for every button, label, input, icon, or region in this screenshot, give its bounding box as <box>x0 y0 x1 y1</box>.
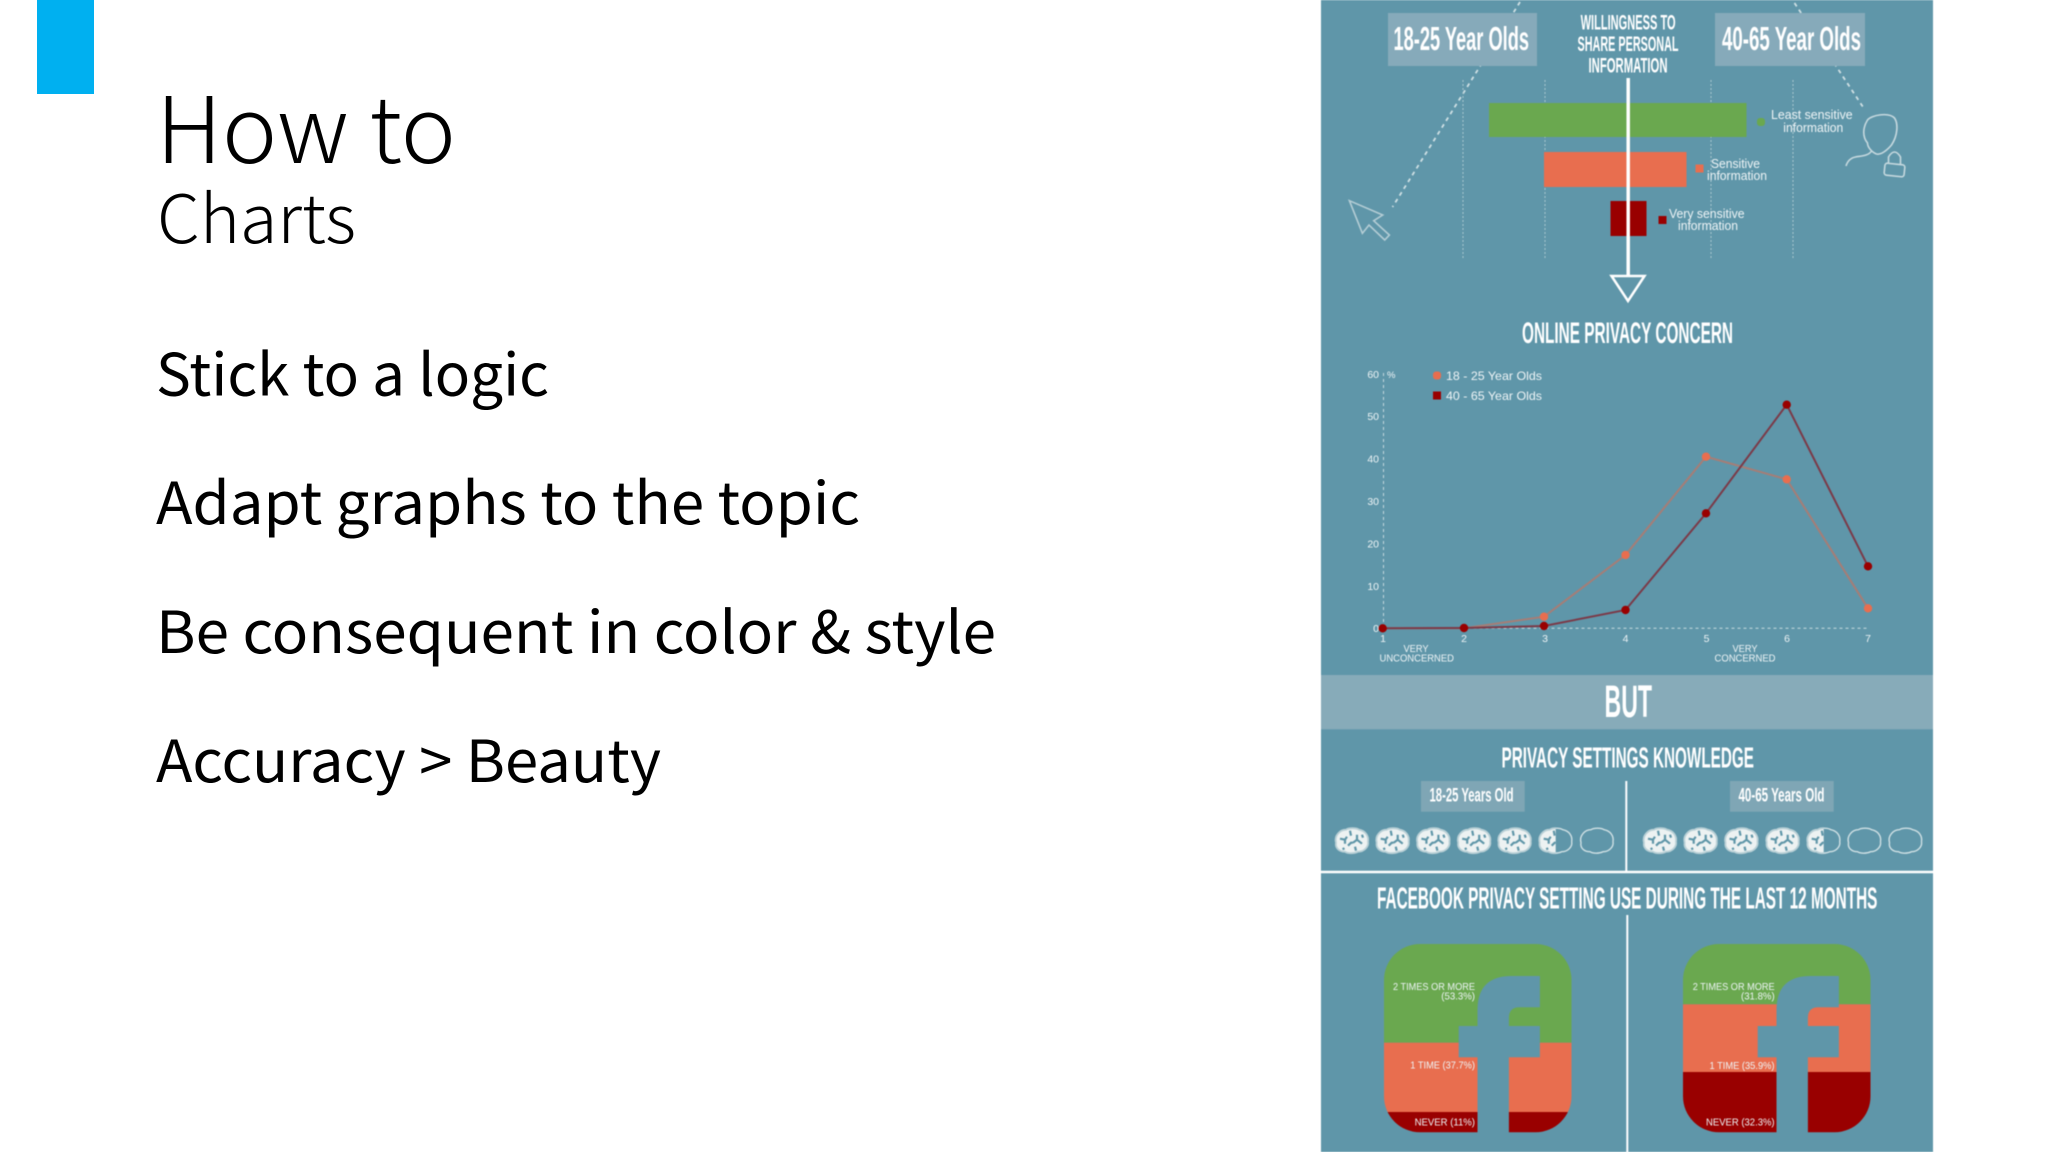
x axis labels: 2 <box>1461 633 1467 645</box>
label box: 40-65: 40-65 Year Olds <box>1722 20 1861 57</box>
chart: facebook logo 18-25: NEVER (11%) <box>1415 1117 1475 1129</box>
axis note: very unconcerned <box>1380 643 1454 665</box>
guideline 4: Accuracy > Beauty <box>156 715 661 799</box>
profile dashed line <box>1794 3 1863 107</box>
arrow <box>1612 78 1644 301</box>
chart legend: 18 - 25 Year Olds <box>1446 369 1542 383</box>
heading: privacy settings knowledge: PRIVACY SETTINGS KNOWLEDGE <box>1502 742 1754 774</box>
chart legend: 40 - 65 Year Olds <box>1446 389 1542 403</box>
panel: infographic <box>1321 0 1933 1152</box>
accent block <box>37 0 94 94</box>
guideline 1: Stick to a logic <box>156 328 549 412</box>
label box: 40-65 years old <box>1730 781 1834 812</box>
icon row: brains 18-25 <box>1336 828 1613 853</box>
legend: sensitive <box>1696 157 1767 183</box>
legend: sensitive: Sensitive <box>1711 157 1760 171</box>
y axis labels: 60 <box>1367 369 1379 381</box>
label box: 40-65 <box>1715 13 1865 66</box>
axis note: very concerned: VERY <box>1732 643 1758 655</box>
subtitle: Charts: Charts <box>157 166 356 263</box>
text block: guidelines <box>156 328 996 799</box>
section: willingness to share <box>1349 2 1905 301</box>
label box: 40-65 years old: 40-65 Years Old <box>1738 784 1824 806</box>
chart axes <box>1384 373 1868 628</box>
x axis labels: 6 <box>1784 633 1790 645</box>
legend: very sensitive: Very sensitive <box>1669 207 1745 221</box>
heading: willingness: SHARE PERSONAL <box>1578 33 1679 56</box>
legend: least sensitive: information <box>1783 121 1843 135</box>
chart: facebook logo 18-25: 1 TIME (37.7%) <box>1410 1059 1475 1071</box>
chart: facebook logo 18-25: (53.3%) <box>1441 990 1475 1002</box>
center divider <box>1625 781 1627 872</box>
axis note: very concerned <box>1714 643 1776 665</box>
axis note: very unconcerned: VERY <box>1404 643 1428 655</box>
y axis labels: 40 <box>1367 454 1379 466</box>
series: 40-65 <box>1378 400 1872 632</box>
heading: willingness: WILLINGNESS TO <box>1581 12 1676 34</box>
x axis labels: 4 <box>1623 633 1629 645</box>
bar: very sensitive <box>1610 201 1646 236</box>
y axis labels: 20 <box>1367 538 1379 550</box>
x axis labels: 3 <box>1542 633 1548 645</box>
y axis labels: 50 <box>1367 411 1379 423</box>
center divider <box>1626 915 1628 1152</box>
heading: willingness: INFORMATION <box>1588 55 1668 78</box>
chart: facebook logo 40-65: 1 TIME (35.9%) <box>1710 1060 1774 1072</box>
bar: sensitive <box>1544 152 1686 187</box>
legend: sensitive: information <box>1707 169 1767 183</box>
chart: facebook logo 18-25: 2 TIMES OR MORE <box>1393 981 1475 993</box>
axis note: very concerned: CONCERNED <box>1714 653 1776 665</box>
y axis labels <box>1367 369 1379 635</box>
chart: facebook logo 18-25 <box>1384 944 1572 1133</box>
label box: 18-25: 18-25 Year Olds <box>1394 20 1529 57</box>
y axis labels: 0 <box>1373 623 1379 635</box>
chart: facebook logo 40-65: NEVER (32.3%) <box>1706 1117 1775 1129</box>
guideline 2: Adapt graphs to the topic <box>156 457 860 541</box>
y axis labels: 10 <box>1367 581 1379 593</box>
chart: facebook logo 40-65 <box>1683 944 1871 1133</box>
section: facebook privacy setting use <box>1377 880 1877 1152</box>
chart: facebook logo 40-65: (31.8%) <box>1741 990 1775 1002</box>
section divider <box>1321 871 1933 873</box>
axis note: very unconcerned: UNCONCERNED <box>1380 653 1454 665</box>
series: 18-25 <box>1383 452 1872 628</box>
chart: facebook logo 40-65: 2 TIMES OR MORE <box>1693 981 1775 993</box>
label box: 18-25 <box>1388 13 1537 66</box>
x axis labels <box>1380 633 1871 645</box>
section: privacy settings knowledge <box>1336 742 1922 872</box>
band: but <box>1321 675 1933 729</box>
guideline 3: Be consequent in color & style <box>156 586 996 670</box>
icon: cursor <box>1349 201 1389 240</box>
legend: very sensitive <box>1658 207 1745 233</box>
icon: profile with lock <box>1846 115 1905 177</box>
legend: least sensitive <box>1757 108 1853 135</box>
legend: very sensitive: information <box>1678 219 1738 233</box>
icon row: brains 40-65 <box>1644 828 1922 853</box>
heading: willingness <box>1578 12 1679 78</box>
band: but: BUT <box>1604 676 1652 727</box>
label box: 18-25 years old: 18-25 Years Old <box>1430 784 1514 806</box>
y axis labels: 30 <box>1367 496 1379 508</box>
bar: least sensitive <box>1489 103 1746 137</box>
legend: least sensitive: Least sensitive <box>1771 108 1853 122</box>
chart legend <box>1433 369 1542 403</box>
heading: online privacy concern: ONLINE PRIVACY CONCERN <box>1522 317 1733 350</box>
title: How to: How to <box>156 57 456 190</box>
x axis labels: 7 <box>1865 633 1871 645</box>
grid lines <box>1463 80 1793 260</box>
line chart: online privacy concern <box>1367 369 1872 665</box>
label box: 18-25 years old <box>1421 781 1525 812</box>
x axis labels: 5 <box>1704 633 1710 645</box>
cursor dashed line <box>1392 2 1520 207</box>
x axis labels: 1 <box>1380 633 1386 645</box>
percent unit: % <box>1387 370 1396 381</box>
